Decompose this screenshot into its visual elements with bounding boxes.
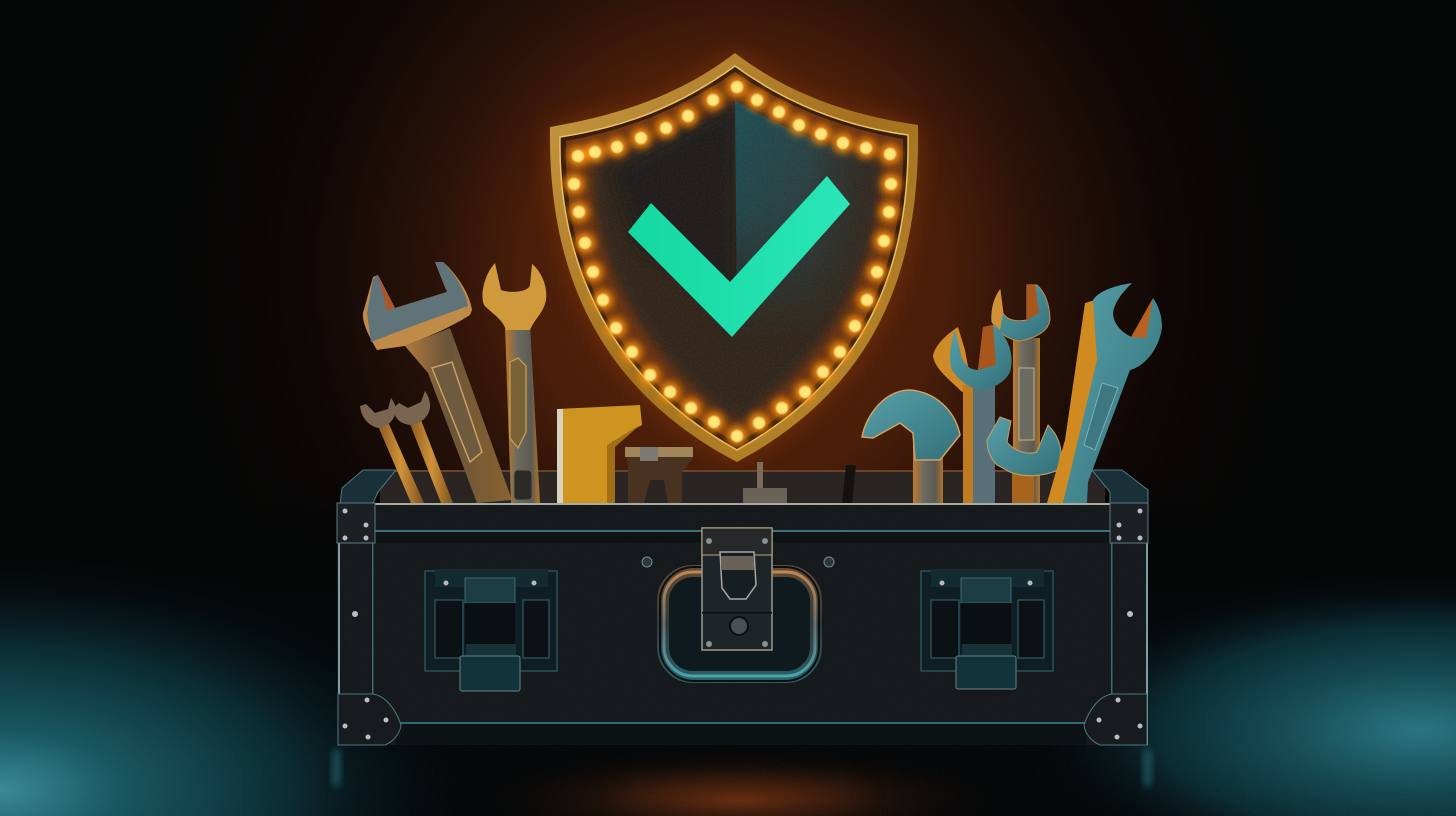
toolbox back wall	[380, 462, 1105, 505]
yellow block tool	[557, 405, 642, 503]
shield	[550, 53, 918, 462]
toolbox left top corner	[340, 470, 396, 505]
left latch	[425, 569, 557, 691]
front small wrench	[987, 417, 1061, 503]
panel rivets	[642, 557, 834, 567]
toolbox	[337, 470, 1148, 745]
light bulbs	[568, 81, 897, 442]
bottom rail	[396, 722, 1086, 745]
small socket tool	[625, 447, 693, 503]
tools: left group	[360, 262, 693, 503]
toolbox front panel	[337, 504, 1148, 745]
centre wrench	[933, 325, 1012, 503]
open-end wrench	[482, 263, 546, 503]
top rim highlights	[375, 503, 1110, 543]
shield inner rim	[560, 66, 908, 450]
small wrench 2	[393, 391, 453, 503]
right corner plate	[1084, 694, 1147, 745]
curved wrench	[862, 390, 960, 504]
tools: right group	[862, 283, 1162, 504]
right latch	[921, 569, 1053, 689]
light halos	[564, 77, 901, 446]
adjustable wrench	[363, 262, 512, 503]
shield face	[560, 70, 910, 450]
shield gold border	[550, 53, 918, 462]
left corner plate	[338, 694, 401, 745]
left corner post	[337, 503, 375, 745]
floor reflection: orange and teal light	[334, 750, 1150, 807]
check mark	[628, 176, 850, 337]
right corner post	[1110, 503, 1148, 745]
large right wrench	[1047, 283, 1162, 503]
toolbox leather texture	[337, 504, 1148, 745]
shield glow	[550, 53, 918, 462]
back wrench	[992, 285, 1050, 503]
small wrench 1	[360, 398, 424, 503]
centre handle ring	[660, 567, 819, 681]
toolbox right top corner	[1092, 470, 1148, 505]
centre hasp plate	[702, 528, 772, 650]
floor: teal reflections	[0, 588, 1456, 816]
